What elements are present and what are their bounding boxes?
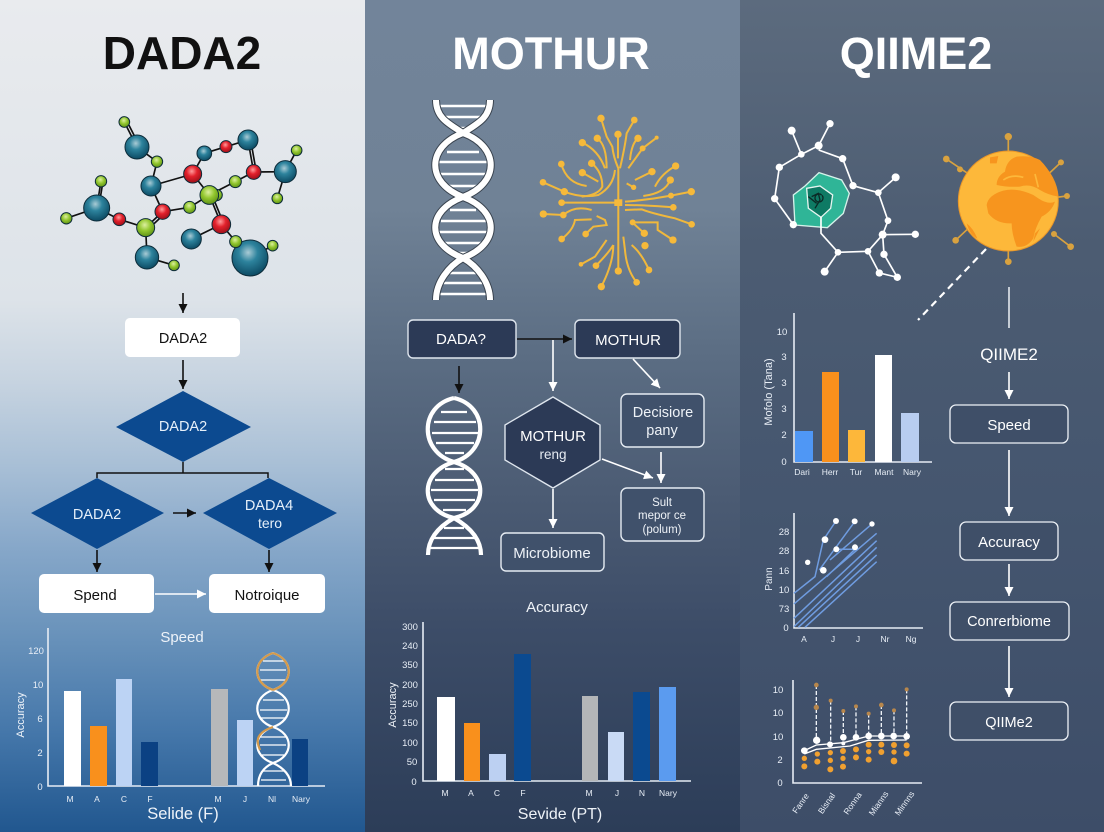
heading: MOTHUR: MOTHUR: [452, 28, 650, 79]
icon: large DNA helix: [435, 100, 491, 300]
chart title: Accuracy: Accuracy: [526, 599, 588, 616]
bar chart: accuracy: Nary: [659, 788, 678, 798]
bar chart: top left: Mofolo (Tana): [763, 358, 775, 426]
bar chart: top left: Nary: [903, 467, 922, 477]
box: Microbiome: Microbiome: [513, 545, 591, 562]
bar chart: accuracy: 200: [402, 680, 418, 691]
line chart: diagonal bands: 28: [779, 527, 789, 538]
bar chart: speed: 10: [33, 680, 43, 691]
decision: DADA2 left: DADA2: [73, 507, 121, 523]
bar chart: speed: Selide (F): [147, 805, 219, 823]
line chart: diagonal bands: 73: [779, 604, 789, 615]
line chart: diagonal bands: 0: [783, 623, 789, 634]
hexagon: MOTHUR reng: MOTHUR: [520, 428, 586, 445]
bar chart: accuracy: C: [494, 788, 500, 798]
line chart: diagonal bands: A: [801, 634, 807, 644]
heading: QIIME2: QIIME2: [840, 28, 992, 79]
bar chart: top left: Mant: [875, 467, 894, 477]
bar chart: top left: 3: [781, 352, 787, 363]
dashed leader line: [918, 249, 986, 320]
bar chart: accuracy: F: [520, 788, 526, 798]
arrow: Spend to Notroique: [155, 593, 206, 595]
arrow: hexagon to Sult: [602, 459, 653, 478]
hexagon: MOTHUR reng: reng: [539, 447, 567, 462]
box: DADA2: DADA2: [159, 331, 207, 347]
bar chart: top left: 10: [777, 327, 787, 338]
panel: DADA2: [0, 0, 365, 832]
dot plot: bottom: Ronna: [841, 790, 864, 816]
bar chart: accuracy: 250: [402, 699, 418, 710]
bar chart: speed: Nary: [292, 794, 311, 804]
box: Spend: [39, 574, 154, 613]
box: MOTHUR: MOTHUR: [595, 332, 661, 349]
box: Notroique: Notroique: [234, 587, 300, 604]
box: Accuracy: [960, 522, 1058, 560]
box: Accuracy: Accuracy: [978, 534, 1040, 551]
line chart: diagonal bands: Ng: [906, 634, 917, 644]
bar chart: speed: J: [243, 794, 247, 804]
arrow: to Speed: [1008, 372, 1010, 399]
arrow: DADA to MOTHUR: [517, 338, 572, 340]
line chart: diagonal bands: 28: [779, 546, 789, 557]
dot plot: bottom: 10: [773, 732, 783, 743]
arrow: to Spend: [96, 550, 98, 572]
dot plot: bottom: 10: [773, 708, 783, 719]
box: QIIMe2: [950, 702, 1068, 740]
label: QIIME2: QIIME2: [980, 345, 1038, 364]
decision: DADA2: DADA2: [159, 419, 207, 435]
box: Notroique: [209, 574, 325, 613]
bar chart: accuracy: M: [585, 788, 593, 798]
decision: DADA2: [116, 391, 251, 462]
bar chart: speed: 0: [37, 782, 43, 793]
bar chart: accuracy: 240: [402, 641, 418, 652]
arrow: between decisions: [173, 512, 196, 514]
bar chart: accuracy: 350: [402, 660, 418, 671]
hexagon: MOTHUR reng: [505, 397, 600, 488]
bar chart: accuracy: J: [615, 788, 619, 798]
bar chart: top left: 2: [781, 430, 787, 441]
dot plot: bottom: Bisnal: [816, 791, 837, 816]
icon: network with green core: [771, 120, 919, 281]
dot plot: bottom: 10: [773, 685, 783, 696]
icon: DNA overlay on chart: [257, 653, 291, 786]
line chart: diagonal bands: 10: [779, 585, 789, 596]
heading: DADA2: DADA2: [103, 27, 261, 79]
panel: QIIME2: [740, 0, 1104, 832]
connector: globe to QIIME2: [1008, 287, 1010, 328]
bar chart: top left: 3: [781, 378, 787, 389]
bar chart: accuracy: Sevide (PT): [518, 806, 602, 823]
line chart: diagonal bands: 16: [779, 566, 789, 577]
bar chart: top left: Herr: [822, 467, 838, 477]
bar chart: speed: C: [121, 794, 127, 804]
bar chart: top left: Dari: [794, 467, 810, 477]
bar chart: speed: [15, 628, 325, 823]
box: DADA?: [408, 320, 516, 358]
box: Sult mepor ce: mepor ce: [638, 510, 686, 522]
bar chart: speed: 2: [37, 748, 43, 759]
box: Speed: Speed: [987, 417, 1031, 434]
box: DADA?: DADA?: [436, 331, 486, 348]
bar chart: accuracy: Accuracy: [387, 682, 399, 728]
line chart: diagonal bands: Pann: [764, 567, 775, 591]
arrow: to Accuracy: [1008, 450, 1010, 516]
arrow: molecule to box: [182, 293, 184, 313]
box: Decisiore pany: Decisiore: [633, 405, 693, 421]
arrow: to small helix: [458, 366, 460, 393]
bar chart: accuracy: N: [639, 788, 645, 798]
box: Decisiore pany: pany: [646, 423, 678, 439]
line chart: diagonal bands: J: [831, 634, 835, 644]
box: Sult mepor ce: [621, 488, 704, 541]
dot plot: bottom: 2: [777, 755, 783, 766]
icon: molecule: [61, 117, 302, 276]
line chart: diagonal bands: Nr: [881, 634, 890, 644]
box: Conrerbiome: Conrerbiome: [967, 614, 1051, 630]
bar chart: speed: M: [66, 794, 74, 804]
box: MOTHUR: [575, 320, 680, 358]
box: Sult mepor ce: (polum): [643, 524, 682, 536]
arrow: box to decision: [182, 360, 184, 389]
box: Speed: [950, 405, 1068, 443]
arrow: hexagon to Microbiome: [552, 489, 554, 528]
icon: orange globe: [943, 133, 1074, 265]
decision: DADA4 tero: tero: [258, 515, 282, 531]
bar chart: top left: 0: [781, 457, 787, 468]
chart title: Speed: Speed: [160, 629, 204, 646]
box: Spend: Spend: [73, 587, 117, 604]
box: Conrerbiome: [950, 602, 1069, 640]
bar chart: speed: Nl: [268, 794, 276, 804]
dot plot: bottom: 0: [777, 778, 783, 789]
dot plot: bottom: Mianns: [867, 789, 890, 817]
arrow: to hexagon: [552, 340, 554, 391]
arrow: Decisiore to Sult: [660, 452, 662, 483]
bar chart: accuracy: M: [441, 788, 449, 798]
bar chart: accuracy: [387, 622, 691, 823]
decision: DADA2 left: [31, 478, 164, 549]
decision: DADA4 tero: DADA4: [245, 498, 293, 514]
bar chart: speed: F: [147, 794, 153, 804]
dot plot: bottom: Minnns: [893, 789, 916, 817]
bar chart: speed: A: [94, 794, 100, 804]
dot plot: bottom: [773, 680, 922, 817]
bar chart: accuracy: 50: [407, 757, 417, 768]
box: Microbiome: [501, 533, 604, 571]
decision: DADA4 tero: [203, 478, 337, 549]
bar chart: speed: 120: [28, 646, 44, 657]
box: Decisiore pany: [621, 394, 704, 447]
bar chart: accuracy: 0: [411, 777, 417, 788]
bar chart: top left: Tur: [850, 467, 862, 477]
bar chart: accuracy: 150: [402, 718, 418, 729]
bar chart: accuracy: A: [468, 788, 474, 798]
bar chart: top left: 3: [781, 404, 787, 415]
bar chart: speed: 6: [37, 714, 43, 725]
arrow: to QIIMe2: [1008, 646, 1010, 697]
connector: branch: [97, 462, 268, 478]
box: QIIMe2: QIIMe2: [985, 715, 1033, 731]
arrow: to Conrerbiome: [1008, 564, 1010, 596]
arrow: MOTHUR to Decisiore: [633, 359, 660, 388]
dot plot: bottom: Fanre: [790, 791, 811, 815]
line chart: diagonal bands: [764, 513, 923, 644]
icon: golden neural circuit: [540, 115, 695, 290]
bar chart: speed: M: [214, 794, 222, 804]
bar chart: accuracy: 100: [402, 738, 418, 749]
box: Sult mepor ce: Sult: [652, 497, 673, 509]
bar chart: speed: Accuracy: [15, 692, 27, 738]
panel: MOTHUR: [365, 0, 740, 832]
line chart: diagonal bands: J: [856, 634, 860, 644]
box: DADA2: [125, 318, 240, 357]
bar chart: top left: [763, 313, 932, 477]
icon: small DNA helix: [428, 398, 481, 555]
bar chart: accuracy: 300: [402, 622, 418, 633]
arrow: to Notroique: [268, 550, 270, 572]
